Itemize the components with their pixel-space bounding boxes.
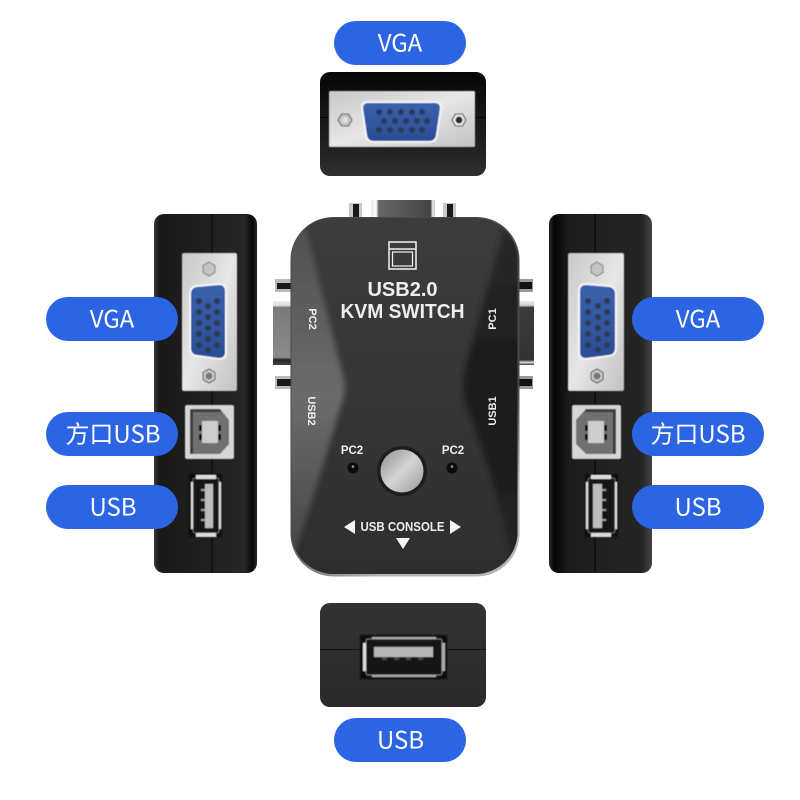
left VGA connector xyxy=(273,279,292,389)
label: right USB: USB xyxy=(674,488,722,522)
LED indicators xyxy=(341,445,464,474)
heading: device name: KVM SWITCH xyxy=(340,301,464,323)
port labels: PC2 xyxy=(306,308,318,330)
label: top VGA: VGA xyxy=(378,24,423,58)
VGA socket xyxy=(579,284,616,359)
panel: top VGA port view xyxy=(320,72,486,176)
right shadow wedge xyxy=(460,230,518,555)
label: right USB xyxy=(632,485,764,529)
label: right square USB xyxy=(632,412,764,456)
silver plate xyxy=(568,253,624,391)
panel: right side ports xyxy=(549,214,652,573)
screws xyxy=(591,262,603,276)
LED indicators: PC2 xyxy=(442,445,464,457)
right labels xyxy=(632,297,764,529)
silver plate xyxy=(329,91,475,147)
LED indicators: PC2 xyxy=(341,445,363,457)
heading: device name xyxy=(340,279,464,323)
left highlight wedge xyxy=(292,229,347,551)
top VGA connector xyxy=(349,200,456,218)
port labels: PC1 xyxy=(487,308,499,330)
device: KVM switch xyxy=(273,200,534,576)
panel: bottom USB port view xyxy=(320,603,486,707)
screws xyxy=(338,114,352,126)
VGA socket xyxy=(362,102,441,142)
panel: left side ports xyxy=(154,214,257,573)
body shell xyxy=(290,217,520,576)
square USB port xyxy=(185,405,234,459)
screws xyxy=(203,262,215,276)
VGA label xyxy=(46,297,178,341)
heading: device name: USB2.0 xyxy=(368,279,438,301)
square USB label xyxy=(46,412,178,456)
USB label: USB xyxy=(89,488,137,522)
label: top VGA xyxy=(334,21,466,65)
square USB label: 方口USB xyxy=(65,414,161,450)
label: bottom USB: USB xyxy=(377,720,424,756)
port labels: USB1 xyxy=(487,396,499,426)
push button xyxy=(377,446,427,496)
USB-A port xyxy=(585,474,618,537)
VGA label: VGA xyxy=(90,300,135,334)
USB label xyxy=(46,485,178,529)
icon: logo window xyxy=(389,242,416,269)
USB-A port xyxy=(189,474,222,537)
silver plate xyxy=(182,253,237,391)
port labels xyxy=(305,308,499,426)
square USB port xyxy=(572,405,621,459)
label: right VGA: VGA xyxy=(676,300,721,334)
label: right square USB: 方口USB xyxy=(650,414,746,450)
label: right VGA xyxy=(632,297,764,341)
VGA socket xyxy=(190,284,226,359)
USB console arrows: USB CONSOLE xyxy=(360,520,444,534)
right VGA connector xyxy=(517,279,534,389)
label: bottom USB xyxy=(334,718,466,762)
USB console arrows xyxy=(344,520,461,549)
left labels xyxy=(46,297,178,529)
port labels: USB2 xyxy=(305,396,317,426)
